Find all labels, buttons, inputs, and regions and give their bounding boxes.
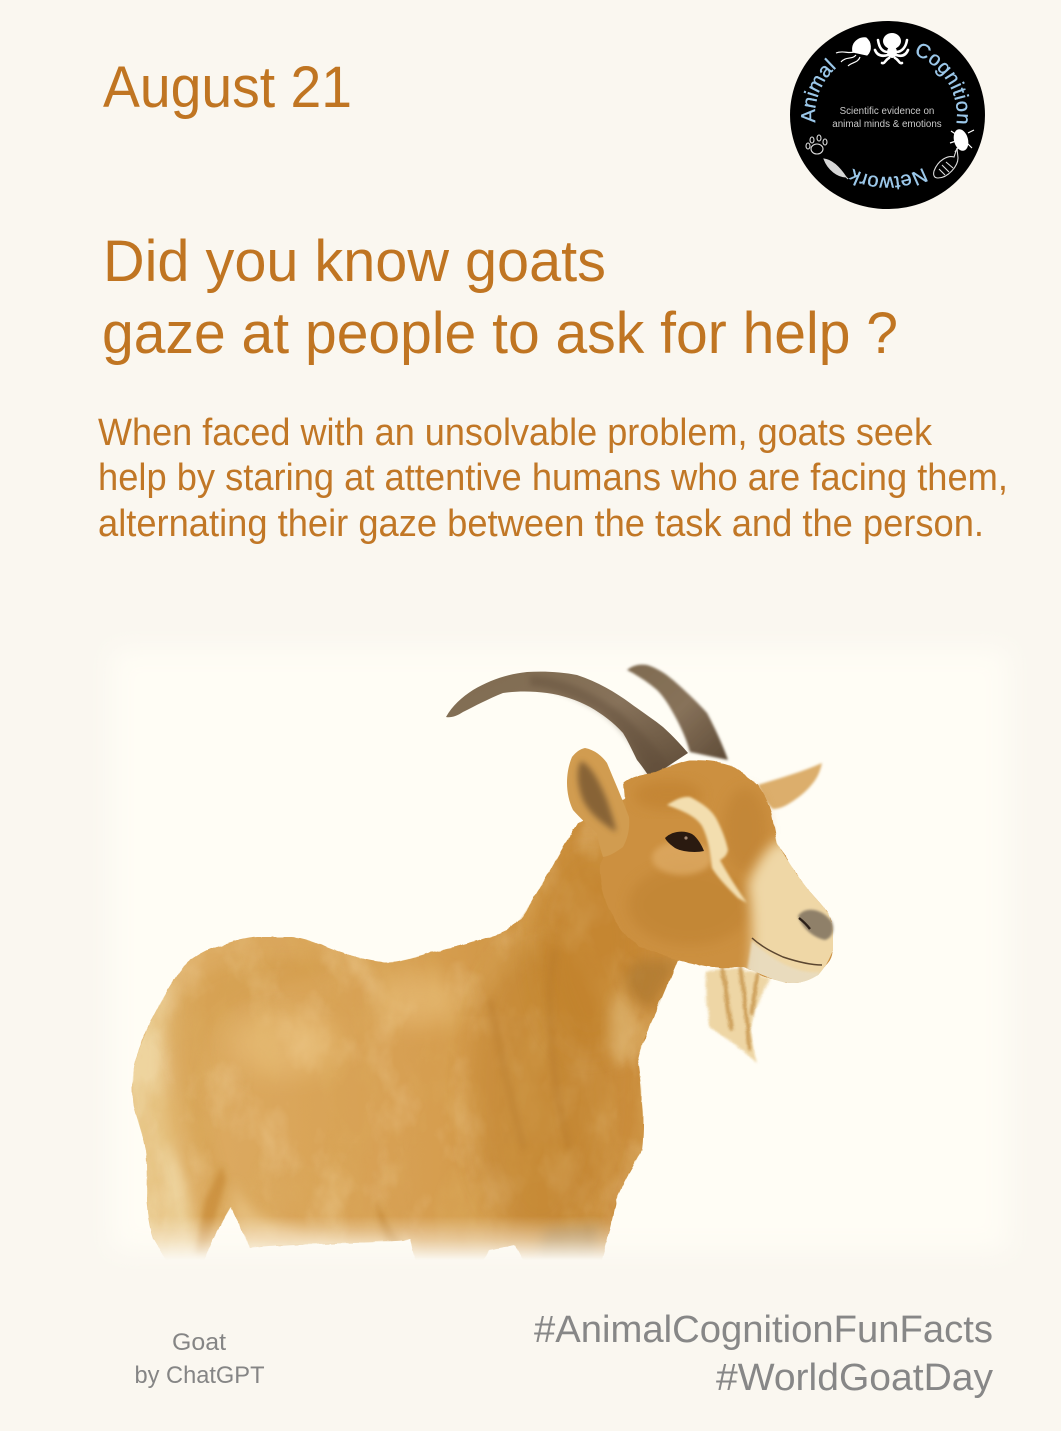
headline question <box>102 229 898 366</box>
headline question: Did you know goats <box>103 229 606 294</box>
badge tagline: Scientific evidence on <box>840 106 934 117</box>
ear: near <box>567 748 629 857</box>
image credit: Goat <box>172 1329 226 1356</box>
hashtags <box>534 1309 993 1399</box>
blaze <box>667 797 747 903</box>
ear: far <box>758 763 822 809</box>
explanatory paragraph: When faced with an unsolvable problem, goats seek <box>98 412 933 454</box>
goat body <box>132 798 678 1258</box>
muzzle <box>740 835 833 983</box>
image credit <box>134 1329 265 1389</box>
badge disc <box>790 21 985 209</box>
headline question: gaze at people to ask for help ? <box>102 301 898 366</box>
icon: paw print <box>806 135 827 154</box>
watercolor goat illustration <box>132 663 835 1258</box>
ring lettering: Network <box>848 168 928 190</box>
hashtags: #AnimalCognitionFunFacts <box>534 1309 993 1351</box>
ring lettering: Animal <box>801 58 836 123</box>
logo badge: Animal Cognition Network <box>790 21 985 209</box>
image credit: by ChatGPT <box>134 1362 265 1389</box>
horn: front <box>446 672 688 778</box>
ring lettering <box>801 44 970 190</box>
date heading: August 21 <box>103 55 352 120</box>
explanatory paragraph: help by staring at attentive humans who are facing them, <box>98 457 1008 499</box>
head shape <box>600 760 833 983</box>
body silhouette <box>132 798 678 1258</box>
eye <box>665 832 704 852</box>
ring lettering: Cognition <box>916 44 970 124</box>
goat head <box>600 760 835 983</box>
icon: octopus <box>875 33 908 63</box>
mouth <box>752 938 822 965</box>
beard <box>706 965 770 1063</box>
explanatory paragraph: alternating their gaze between the task and the person. <box>98 503 984 545</box>
body washes <box>132 798 676 1254</box>
badge tagline <box>832 106 942 130</box>
horn: rear <box>627 665 728 760</box>
icon: beetle <box>950 128 974 152</box>
icon: fish <box>934 148 958 178</box>
explanatory paragraph <box>98 412 1008 545</box>
icon: jellyfish <box>836 38 870 66</box>
badge tagline: animal minds & emotions <box>832 119 942 130</box>
icon: feather <box>824 159 848 179</box>
nose <box>798 910 833 940</box>
hashtags: #WorldGoatDay <box>716 1357 993 1399</box>
paper panel <box>112 650 1008 1250</box>
